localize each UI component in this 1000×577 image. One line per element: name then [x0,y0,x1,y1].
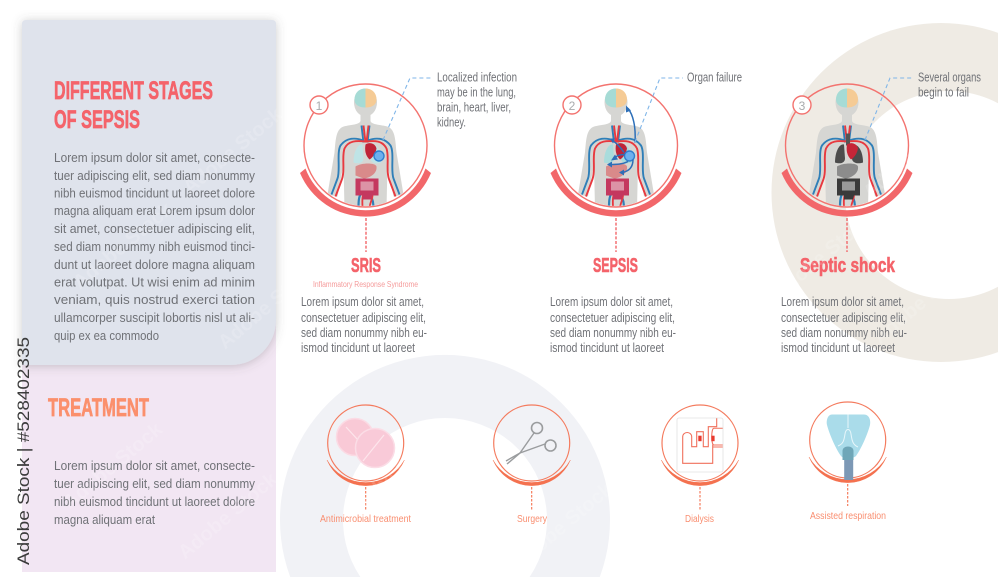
label: surgery: Surgery [517,513,548,525]
main title: OF SEPSIS [54,106,140,134]
text: stage 3: consectetuer adipiscing elit, [781,310,906,325]
intro text: nibh euismod tincidunt ut laoreet dolore [54,186,255,200]
background ring: beige [772,23,1000,362]
stage 2: SEPSIS [550,70,742,355]
treatment: surgery [493,405,570,525]
intro text: sed diam nonummy nibh euismod tinci- [54,239,255,254]
watermark: faint diagonal stock marks: Adobe Stock [509,478,618,574]
text: stage 2: Lorem ipsum dolor sit amet, [550,294,673,309]
leader line and callout: localized infection: kidney. [437,114,466,130]
watermark: faint diagonal stock marks: Adobe Stock [859,108,968,204]
text: stage 2: consectetuer adipiscing elit, [550,310,675,325]
text: stage 1: sed diam nonummy nibh eu- [301,325,427,340]
stage 1: SRIS [300,70,517,355]
main title [54,77,213,134]
intro text: sit amet, consectetuer adipiscing elit, [54,221,255,236]
label: antimicrobial treatment: Antimicrobial treatment [320,513,411,525]
treatment: assisted respiration [809,402,886,522]
watermark: faint diagonal stock marks: Adobe Stock [174,468,283,564]
leader line and callout: localized infection: Localized infection [437,70,517,84]
heading: septic shock: Septic shock [800,255,896,277]
treatment: antimicrobial [320,405,411,525]
text: stage 2: ismod tincidunt ut laoreet [550,340,664,355]
watermark: faint diagonal stock marks: Adobe Stock [869,253,978,349]
intro text: ullamcorper suscipit lobortis nisl ut ali- [54,310,255,325]
icon: body with organs and spreading arrows, stage 2 [550,84,682,217]
panel: treatment [22,320,276,572]
text: stage 1: consectetuer adipiscing elit, [301,310,426,325]
intro text: quip ex ea commodo [54,328,159,343]
stage 3: septic shock [781,70,981,355]
watermark: faint diagonal stock marks: Adobe Stock [59,418,168,514]
text: stage 1: ismod tincidunt ut laoreet [301,340,415,355]
watermark: faint diagonal stock marks: Adobe Stock [339,428,448,524]
leader line and callout: organ failure [635,70,742,142]
leader line and callout: localized infection [383,70,517,140]
text: stage 1 [301,294,427,355]
intro text [54,150,256,343]
badge: number 3: 3 [799,99,806,113]
treatment text: Lorem ipsum dolor sit amet, consecte- [54,458,255,473]
treatment text: magna aliquam erat [54,512,155,527]
treatment text: nibh euismod tincidunt ut laoreet dolore [54,494,255,509]
background ring: grey [280,355,610,577]
treatment heading: TREATMENT [48,394,149,422]
watermark: faint diagonal stock marks: Adobe Stock [769,208,878,304]
intro text: Lorem ipsum dolor sit amet, consecte- [54,150,255,165]
leader line and callout: several organs: begin to fail [918,84,969,100]
text: stage 3: Lorem ipsum dolor sit amet, [781,294,904,309]
icon: respiration mask [809,402,886,483]
leader line and callout: organ failure: Organ failure [687,70,742,84]
panel: different stages of sepsis [22,20,276,365]
intro text: erat volutpat. Ut wisi enim ad minim [54,274,255,290]
label: dialysis: Dialysis [685,513,714,525]
badge: number 1: 1 [316,99,323,113]
leader line and callout: localized infection: brain, heart, liver, [437,100,511,114]
heading: SEPSIS: SEPSIS [593,255,638,277]
intro text: tuer adipiscing elit, sed diam nonummy [54,168,255,183]
icon: scissors [493,405,570,486]
treatment text: tuer adipiscing elit, sed diam nonummy [54,476,255,491]
intro text: veniam, quis nostrud exerci tation [54,292,255,307]
icon: dialysis machine [661,405,739,486]
text: stage 1: Lorem ipsum dolor sit amet, [301,294,424,309]
heading: SRIS: SRIS [351,255,381,277]
badge: number 2 [563,96,581,114]
icon: body with failing organs, stage 3 [782,84,912,217]
text: stage 2 [550,294,676,355]
badge: number 3 [793,96,811,114]
intro text: magna aliquam erat Lorem ipsum dolor [54,203,256,218]
text: stage 2: sed diam nonummy nibh eu- [550,325,676,340]
main title: DIFFERENT STAGES [54,77,213,105]
watermark: faint diagonal stock marks: Adobe Stock [179,103,288,199]
watermark: stock id: Adobe Stock | #528402335 [14,337,33,565]
text: stage 3: ismod tincidunt ut laoreet [781,340,895,355]
text: stage 3 [781,294,907,355]
watermark: faint diagonal stock marks [59,103,978,574]
icon: body with organs, stage 1 [300,84,431,217]
leader line and callout: several organs [865,70,981,140]
badge: number 1 [310,96,328,114]
watermark: faint diagonal stock marks: Adobe Stock [214,258,323,354]
treatment: dialysis [661,405,739,525]
subheading: inflammatory response syndrome: Inflammatory Response Syndrome [313,279,418,289]
text: stage 3: sed diam nonummy nibh eu- [781,325,907,340]
watermark: faint diagonal stock marks: Adobe Stock [69,198,178,294]
label: assisted respiration: Assisted respiration [810,510,886,522]
intro text: dunt ut laoreet dolore magna aliquam [54,257,255,272]
treatment text [54,458,255,527]
leader line and callout: localized infection: may be in the lung, [437,84,516,100]
badge: number 2: 2 [569,99,576,113]
icon: pills [327,405,404,486]
